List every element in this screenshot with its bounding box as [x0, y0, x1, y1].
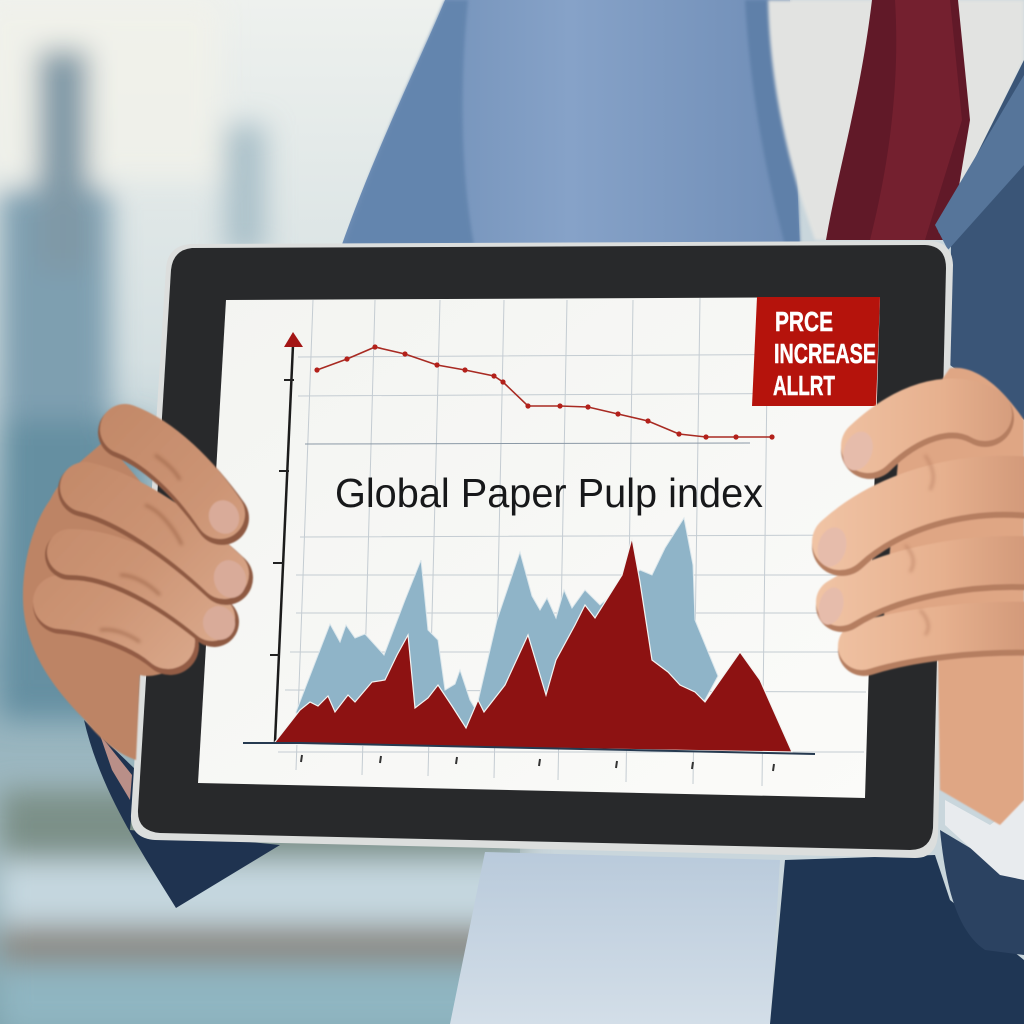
vertical axis with arrow [270, 332, 303, 742]
tablet screen [198, 297, 884, 798]
price alert badge: PRCE [775, 306, 833, 337]
right fingers [840, 405, 1024, 650]
left fingers [60, 429, 226, 646]
right knuckle creases [905, 455, 933, 635]
price alert badge: INCREASE [774, 338, 876, 369]
red area chart [275, 538, 792, 752]
left hand [23, 429, 250, 760]
tablet silver edge [131, 241, 953, 858]
lower jacket [450, 852, 780, 1024]
right lapel [938, 60, 1024, 420]
right hand [813, 368, 1024, 825]
left palm [23, 440, 195, 760]
tablet bezel [138, 245, 946, 850]
blue area chart [296, 518, 718, 742]
left fingernails [199, 496, 250, 644]
chart title: Global Paper Pulp index [335, 470, 763, 516]
grid lines [278, 298, 874, 786]
left knuckle creases [100, 455, 182, 642]
tablet [131, 241, 953, 858]
price alert badge: ALLRT [773, 370, 835, 401]
price alert badge [752, 297, 884, 406]
right fingernails [813, 427, 878, 627]
right wrist and palm [880, 368, 1024, 825]
red line chart [314, 344, 775, 440]
blurred city background [0, 0, 520, 1024]
horizontal axis with ticks [243, 743, 815, 771]
shirt [768, 0, 1024, 240]
necktie [826, 0, 970, 240]
